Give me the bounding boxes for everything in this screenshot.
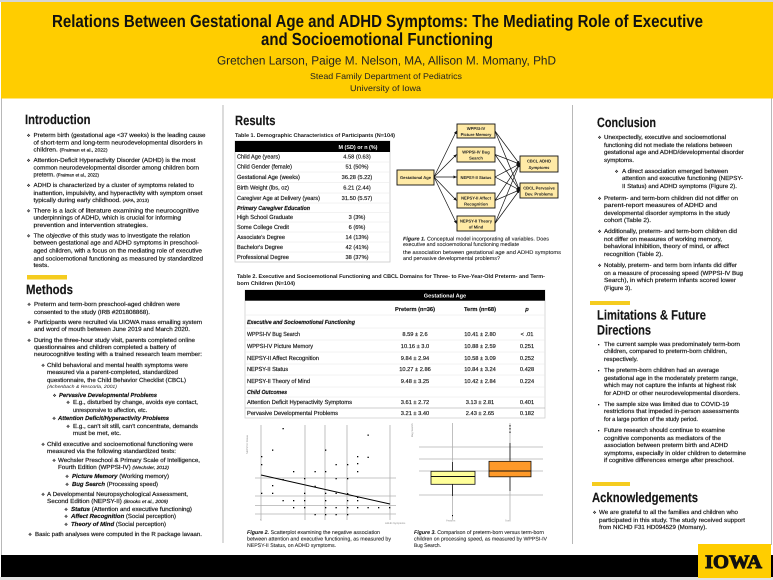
methods bullets: questionnaire, the Child Behavior Checklist (CBCL): [47, 377, 186, 384]
methods bullets: Attention Deficit/Hyperactivity Problems: [57, 415, 170, 422]
limitations bullets: symptoms, especially in older children to determine: [604, 450, 747, 457]
authors: Gretchen Larson, Paige M. Nelson, MA, Allison M. Momany, PhD: [217, 54, 556, 68]
limitations bullets: The sample size was limited due to COVID-19: [604, 401, 729, 408]
conclusion bullets: gestational age and ADHD/developmental disorder: [604, 149, 744, 156]
introduction bullets: and socioemotional functioning as measured by standardized: [34, 255, 203, 262]
methods bullets: unresponsive to affection, etc.: [73, 407, 147, 414]
figure 1: conceptual model: [397, 124, 558, 231]
table 2 functioning and cbcl domains: Child Outcomes: [247, 389, 288, 396]
figure 3 caption: children on processing speed, as measured by WPPSI-IV: [414, 536, 547, 542]
methods bullets: Picture Memory (Working memory): [72, 473, 169, 480]
conclusion bullets: developmental disorder symptoms in the study: [604, 210, 730, 217]
methods bullets: ❖: [27, 302, 31, 308]
methods bullets: Theory of Mind (Social perception): [71, 521, 166, 528]
table 2 functioning and cbcl domains: 9.48 ± 3.25: [401, 379, 429, 385]
table 2 functioning and cbcl domains: 0.251: [520, 344, 534, 350]
methods bullets: ❖: [27, 320, 31, 326]
introduction bullets: aged children, with a focus on the mediating role of executive: [34, 248, 203, 255]
figure 1 caption: executive and socioemotional functioning mediate: [403, 242, 519, 248]
table 2 functioning and cbcl domains: 0.252: [520, 356, 534, 362]
introduction bullets: [26, 132, 206, 269]
table 2 functioning and cbcl domains: 10.88 ± 2.59: [464, 344, 496, 350]
arrows from mediators to outcomes: [495, 131, 520, 224]
introduction bullets: typically during early childhood. (APA, 2013): [34, 197, 149, 204]
table 1 demographics: Bachelor's Degree: [237, 244, 284, 251]
limitations bullets: The current sample was predominately term-born: [604, 341, 740, 348]
methods bullets: A Developmental Neuropsychological Assessment,: [47, 491, 188, 498]
methods bullets: E.g., disturbed by change, avoids eye contact,: [73, 399, 198, 406]
logo: iowa: [698, 544, 771, 578]
conclusion bullets: Additionally, preterm- and term-born children did: [604, 228, 737, 235]
table 1 demographics: Associate's Degree: [237, 234, 286, 241]
acknowledgements text: [592, 509, 745, 531]
limitations bullets: if cognitive differences emerge after preschool.: [604, 457, 734, 464]
conclusion bullets: ❖: [614, 169, 619, 175]
table 1 demographics: 14 (13%): [345, 234, 369, 241]
methods bullets: ❖: [64, 507, 68, 513]
conclusion bullets: symptoms.: [604, 158, 634, 164]
table 1 demographics: 51 (50%): [345, 164, 369, 171]
figure 2 caption: Figure 2. Scatterplot examining the negative association: [247, 530, 380, 536]
affiliation: [310, 71, 462, 93]
figure 3 caption: Figure 3. Comparison of preterm-born versus term-born: [414, 530, 544, 536]
table 1 demographics: Professional Degree: [237, 254, 290, 261]
conclusion bullets: on a measure of processing speed (WPPSI-IV Bug: [604, 270, 743, 277]
limitations bullets: Future research should continue to examine: [604, 427, 726, 434]
acknowledgements text: ❖: [592, 510, 597, 516]
table 1 demographics: 4.58 (0.63): [343, 154, 371, 161]
conclusion bullets: not differ on measures of working memory,: [604, 236, 722, 243]
limitations bullets: children, compared to preterm-born children,: [604, 348, 727, 355]
methods bullets: Pervasive Developmental Problems: [59, 392, 158, 399]
title: [52, 11, 703, 49]
methods bullets: Preterm and term-born preschool-aged children were: [34, 301, 181, 308]
node: gestational age: Gestational Age: [400, 175, 432, 180]
methods bullets: Second Edition (NEPSY-II) (Brooks et al., 2009): [47, 498, 168, 505]
methods bullets: ❖: [28, 532, 32, 538]
conclusion bullets: attention and executive functioning (NEPSY-: [622, 175, 743, 182]
table 2 functioning and cbcl domains: Pervasive Developmental Problems: [247, 410, 338, 417]
methods bullets: consented to the study (IRB #201808868).: [34, 309, 150, 316]
node: status: NEPSY-II Status: [461, 175, 492, 180]
limitations bullets: for ADHD or other neurodevelopmental disorders.: [604, 390, 740, 397]
conclusion bullets: cohort (Table 2).: [604, 217, 651, 224]
methods bullets: (Achenbach & Rescorla, 2001): [47, 384, 118, 389]
introduction bullets: common neurodevelopmental disorder among children born: [34, 164, 199, 171]
table 2 functioning and cbcl domains: 3.21 ± 3.40: [401, 411, 429, 417]
table 2 functioning and cbcl domains: 10.42 ± 2.84: [464, 379, 496, 385]
node: picture memory: WPPSI-IV: [467, 126, 485, 131]
table 2 functioning and cbcl domains: 10.58 ± 3.09: [464, 356, 496, 362]
figure 2 caption: between attention and executive functioning, as measured by: [247, 536, 391, 542]
table 1 demographics: 3 (3%): [349, 214, 365, 221]
panel: results: [235, 113, 561, 549]
limitations bullets: [598, 341, 747, 464]
introduction bullets: ❖: [26, 209, 31, 215]
methods bullets: ❖: [66, 400, 70, 406]
conclusion bullets: parent-report measures of ADHD and: [604, 202, 717, 209]
table 1 demographics: 6.21 (2.44): [343, 185, 371, 192]
heading: methods: Methods: [26, 282, 73, 297]
header banner: [1, 2, 773, 98]
conclusion bullets: ❖: [598, 263, 602, 269]
methods bullets: ❖: [41, 363, 45, 369]
heading: results: Results: [235, 113, 276, 128]
introduction bullets: ❖: [26, 183, 31, 189]
methods bullets: Bug Search (Processing speed): [72, 481, 158, 488]
table 1 demographics: M (SD) or n (%): [338, 144, 378, 151]
table 2 functioning and cbcl domains: 10.84 ± 3.24: [464, 367, 496, 373]
node: pervasive problems: CBCL Pervasive: [523, 186, 555, 190]
table 2 functioning and cbcl domains: < .01: [521, 332, 533, 338]
table 1 demographics: Birth Weight (lbs, oz): [237, 185, 289, 192]
conclusion bullets: (Figure 3).: [604, 285, 632, 292]
table 2 functioning and cbcl domains: 8.59 ± 2.6: [402, 332, 428, 338]
table 1 demographics: High School Graduate: [237, 214, 294, 221]
node: affect recognition: [457, 193, 495, 208]
methods bullets: ❖: [27, 338, 31, 344]
methods bullets: Participants were recruited via UIOWA mass emailing system: [34, 319, 202, 326]
limitations bullets: for a large portion of the study period.: [604, 416, 698, 423]
introduction bullets: children. (Fraiman et al., 2022): [34, 146, 108, 153]
table 2 functioning and cbcl domains: Attention Deficit Hyperactivity Symptoms: [247, 399, 352, 406]
node: adhd symptoms: CBCL ADHD: [527, 158, 551, 164]
table 2 functioning and cbcl domains: p: [524, 307, 529, 313]
limitations bullets: restrictions that impeded in-person assessments: [604, 408, 739, 415]
node: bug search: Search: [469, 156, 483, 160]
node: status: [457, 170, 495, 185]
conclusion bullets: functioning did not mediate the relations between: [604, 142, 732, 149]
methods bullets: Fourth Edition (WPPSI-IV) (Wechsler, 2012): [58, 464, 169, 471]
methods bullets: Status (Attention and executive functioning): [71, 506, 192, 513]
heading: limitations: Limitations & Future: [597, 308, 706, 322]
introduction bullets: tests.: [34, 263, 49, 269]
methods bullets: [27, 301, 202, 538]
divider: limitations accent bar: [590, 301, 630, 305]
table 1 demographics: Child Gender (female): [237, 164, 292, 171]
conclusion bullets: behavioral inhibition, theory of mind, or affect: [604, 243, 729, 250]
conclusion bullets: ❖: [598, 229, 602, 235]
limitations bullets: respectively.: [604, 356, 638, 363]
table 2 functioning and cbcl domains: WPPSI-IV Picture Memory: [247, 343, 313, 350]
conclusion bullets: A direct association emerged between: [622, 168, 728, 175]
table 2 functioning and cbcl domains: NEPSY-II Theory of Mind: [247, 378, 310, 385]
table 2 functioning and cbcl domains: 2.43 ± 2.65: [466, 411, 494, 417]
conclusion bullets: Unexpectedly, executive and socioemotional: [604, 134, 726, 141]
table 1 demographics: Primary Caregiver Education: [237, 205, 310, 212]
table 2 functioning and cbcl domains: NEPSY-II Status: [247, 366, 288, 373]
heading: introduction: Introduction: [25, 112, 90, 127]
arrows from gestational age to mediators: [434, 131, 456, 224]
table 2 functioning and cbcl domains: 10.41 ± 2.80: [464, 332, 496, 338]
conclusion bullets: Notably, preterm- and term born infants did differ: [604, 262, 737, 269]
methods bullets: ❖: [41, 442, 45, 448]
figure 3: boxplot: [411, 423, 543, 522]
table 1 demographics: 31.50 (5.57): [342, 195, 372, 202]
methods bullets: neurocognitive testing with a trained research team member:: [34, 351, 202, 358]
methods bullets: ❖: [64, 522, 68, 528]
figure 1 caption: [403, 236, 561, 262]
conclusion bullets: ❖: [598, 135, 602, 141]
introduction bullets: ADHD is characterized by a cluster of symptoms related to: [34, 182, 195, 189]
table 2 functioning and cbcl domains: 0.401: [520, 400, 534, 406]
methods bullets: ❖: [65, 482, 69, 488]
introduction bullets: ❖: [26, 234, 31, 240]
affiliation: Stead Family Department of Pediatrics: [310, 71, 462, 81]
table 2 functioning and cbcl domains: 0.224: [520, 379, 534, 385]
methods bullets: must be met, etc.: [73, 430, 121, 437]
conclusion bullets: II Status) and ADHD symptoms (Figure 2).: [622, 183, 737, 190]
table 1 demographics: 42 (41%): [345, 244, 369, 251]
methods bullets: ❖: [65, 474, 69, 480]
methods bullets: E.g., can't sit still, can't concentrate, demands: [73, 423, 198, 430]
table 2 functioning and cbcl domains: 3.61 ± 2.72: [401, 400, 429, 406]
table 1 demographics: Gestational Age (weeks): [237, 174, 300, 181]
heading: acknowledgements: Acknowledgements: [592, 490, 698, 505]
methods bullets: questionnaires and children completed a battery of: [34, 344, 176, 351]
table 1 demographics: Child Age (years): [237, 154, 280, 161]
table 1 demographics: 6 (6%): [349, 224, 365, 231]
table 1 demographics: Some College Credit: [237, 224, 289, 231]
figure 1 caption: and pervasive developmental problems?: [403, 256, 500, 262]
table 1 demographics: [235, 141, 390, 262]
introduction bullets: The objective of this study was to investigate the relation: [34, 233, 190, 240]
methods bullets: Wechsler Preschool & Primary Scale of Intelligence,: [58, 457, 200, 464]
acknowledgements text: participated in this study. The study received support: [599, 517, 745, 524]
introduction bullets: inattention, impulsivity, and hyperactivity with symptom onset: [34, 190, 203, 197]
acknowledgements text: from NICHD F31 HD094529 (Momany).: [599, 524, 707, 531]
table 1 demographics: Caregiver Age at Delivery (years): [237, 195, 320, 202]
introduction bullets: ❖: [26, 133, 31, 139]
divider: acknowledgements accent bar: [592, 482, 630, 486]
footer bar: [1, 555, 773, 577]
limitations bullets: The preterm-born children had an average: [604, 367, 720, 374]
node: pervasive problems: Dev. Problems: [525, 192, 554, 196]
node: picture memory: Picture Memory: [461, 132, 492, 137]
table 2 functioning and cbcl domains: [245, 290, 545, 418]
methods bullets: ❖: [64, 514, 68, 520]
table 2 functioning and cbcl domains: Term (n=68): [464, 306, 496, 313]
figure 3 caption: Bug Search.: [414, 543, 441, 549]
panel: acknowledgements: [592, 490, 745, 531]
introduction bullets: of short-term and long-term neurodevelopmental disorders in: [34, 139, 202, 146]
methods bullets: Child executive and socioemotional functioning were: [47, 441, 194, 448]
title: and Socioemotional Functioning: [261, 29, 493, 49]
node: pervasive problems: [520, 183, 558, 198]
table 2 functioning and cbcl domains: 0.182: [520, 411, 534, 417]
table 2 functioning and cbcl domains: 10.16 ± 3.0: [401, 344, 429, 350]
figure 1 caption: the association between gestational age and ADHD symptoms: [403, 250, 561, 256]
introduction bullets: ❖: [26, 158, 31, 164]
introduction bullets: underpinnings of ADHD, which is crucial for informing: [34, 215, 181, 222]
node: theory of mind: NEPSY-II Theory: [460, 218, 493, 224]
table 2 functioning and cbcl domains: WPPSI-IV Bug Search: [247, 331, 300, 338]
methods bullets: Affect Recognition (Social perception): [70, 513, 176, 520]
limitations bullets: association between preterm birth and ADHD: [604, 442, 728, 449]
logo: iowa: IOWA: [705, 552, 762, 573]
figure 2: scatterplot: NEPSY-II Status: [246, 434, 249, 454]
figure 1 caption: Figure 1. Conceptual model incorporating all variables. Does: [403, 236, 549, 242]
conclusion bullets: [598, 134, 744, 292]
table 1 title: Table 1. Demographic Characteristics of Participants (N=104): [235, 133, 395, 139]
figure 2: scatterplot: [246, 425, 406, 525]
introduction bullets: Preterm birth (gestational age <37 weeks) is the leading cause: [34, 132, 206, 139]
table 2 functioning and cbcl domains: 10.27 ± 2.86: [399, 367, 431, 373]
table 1 demographics: 38 (37%): [345, 254, 369, 261]
methods bullets: ❖: [52, 458, 56, 464]
table 2 functioning and cbcl domains: Gestational Age: [424, 292, 466, 300]
node: picture memory: [457, 124, 495, 138]
node: bug search: WPPSI-IV Bug: [462, 150, 490, 154]
node: gestational age: [397, 170, 434, 185]
methods bullets: ❖: [41, 492, 45, 498]
node: adhd symptoms: [520, 156, 558, 172]
figure 2 caption: [247, 530, 391, 549]
introduction bullets: preterm. (Fraiman et al., 2022): [34, 172, 99, 178]
table 2 functioning and cbcl domains: 9.84 ± 2.94: [401, 356, 429, 362]
table 2 title: Table 2. Executive and Socioemotional Functioning and CBCL Domains for Three- to Five-Year-Old Preterm- and Term-: [237, 274, 545, 280]
methods bullets: ❖: [52, 393, 57, 399]
figure 2: scatterplot: 5: [260, 519, 262, 522]
node: affect recognition: NEPSY-II Affect: [461, 196, 492, 200]
node: bug search: [457, 147, 495, 162]
limitations bullets: which may not capture the infants at highest risk: [603, 382, 736, 389]
table 2 functioning and cbcl domains: NEPSY-II Affect Recognition: [247, 355, 319, 362]
figure 2 caption: NEPSY-II Status, on ADHD symptoms.: [247, 543, 336, 549]
table 2 title: born Children (N=104): [237, 281, 295, 287]
node: affect recognition: Recognition: [464, 202, 488, 206]
methods bullets: During the three-hour study visit, parents completed online: [34, 337, 196, 344]
introduction bullets: between gestational age and ADHD symptoms in preschool-: [34, 240, 199, 247]
introduction bullets: There is a lack of literature examining the neurocognitive: [34, 208, 200, 215]
introduction bullets: prevention and intervention strategies.: [34, 222, 148, 229]
table 2 title: [237, 274, 545, 287]
methods bullets: measured via the following standardized tests:: [47, 448, 176, 455]
panel: methods: [26, 282, 202, 538]
limitations bullets: gestational age in the moderately preterm range,: [604, 375, 738, 382]
table 2 functioning and cbcl domains: Preterm (n=36): [395, 306, 435, 313]
figure 3 caption: [414, 530, 547, 549]
heading: limitations: [597, 308, 706, 338]
panel: conclusion: [597, 115, 744, 292]
conclusion bullets: Search), in which preterm infants scored lower: [604, 277, 736, 284]
figure 2: scatterplot: ADHD Symptoms: [385, 522, 406, 525]
methods bullets: and word of mouth between June 2019 and March 2020.: [34, 326, 190, 333]
figure 3: boxplot: Term: [505, 520, 511, 522]
panel: introduction: [25, 112, 206, 269]
panel: limitations and future directions: [597, 308, 747, 464]
limitations bullets: cognitive components as mediators of the: [604, 435, 722, 442]
methods bullets: ❖: [66, 424, 70, 430]
divider: methods accent bar: [27, 275, 67, 280]
node: adhd symptoms: Symptoms: [529, 165, 550, 170]
methods bullets: Child behavioral and mental health symptoms were: [47, 362, 189, 369]
table 2 functioning and cbcl domains: 3.13 ± 2.81: [466, 400, 494, 406]
node: theory of mind: of Mind: [469, 224, 484, 230]
conclusion bullets: ❖: [598, 196, 602, 202]
methods bullets: measured via a parent-completed, standardized: [47, 369, 178, 376]
node: theory of mind: [457, 216, 495, 231]
methods bullets: ❖: [52, 416, 56, 422]
conclusion bullets: recognition (Table 2).: [604, 251, 663, 258]
affiliation: University of Iowa: [350, 83, 421, 93]
table 1 demographics: 36.28 (5.22): [342, 174, 372, 181]
heading: conclusion: Conclusion: [597, 115, 656, 130]
table 2 functioning and cbcl domains: Executive and Socioemotional Functioning: [247, 319, 355, 326]
table 2 functioning and cbcl domains: 0.428: [520, 367, 534, 373]
heading: limitations: Directions: [597, 322, 651, 338]
methods bullets: Basic path analyses were computed in the R package lavaan.: [35, 531, 202, 538]
conclusion bullets: Preterm- and term-born children did not differ on: [604, 195, 738, 202]
introduction bullets: Attention-Deficit Hyperactivity Disorder (ADHD) is the most: [34, 157, 196, 164]
figure 3: boxplot: Preterm: [446, 520, 455, 522]
acknowledgements text: We are grateful to all the families and children who: [599, 509, 739, 516]
figure 3: boxplot: Bug Search: [411, 423, 414, 437]
